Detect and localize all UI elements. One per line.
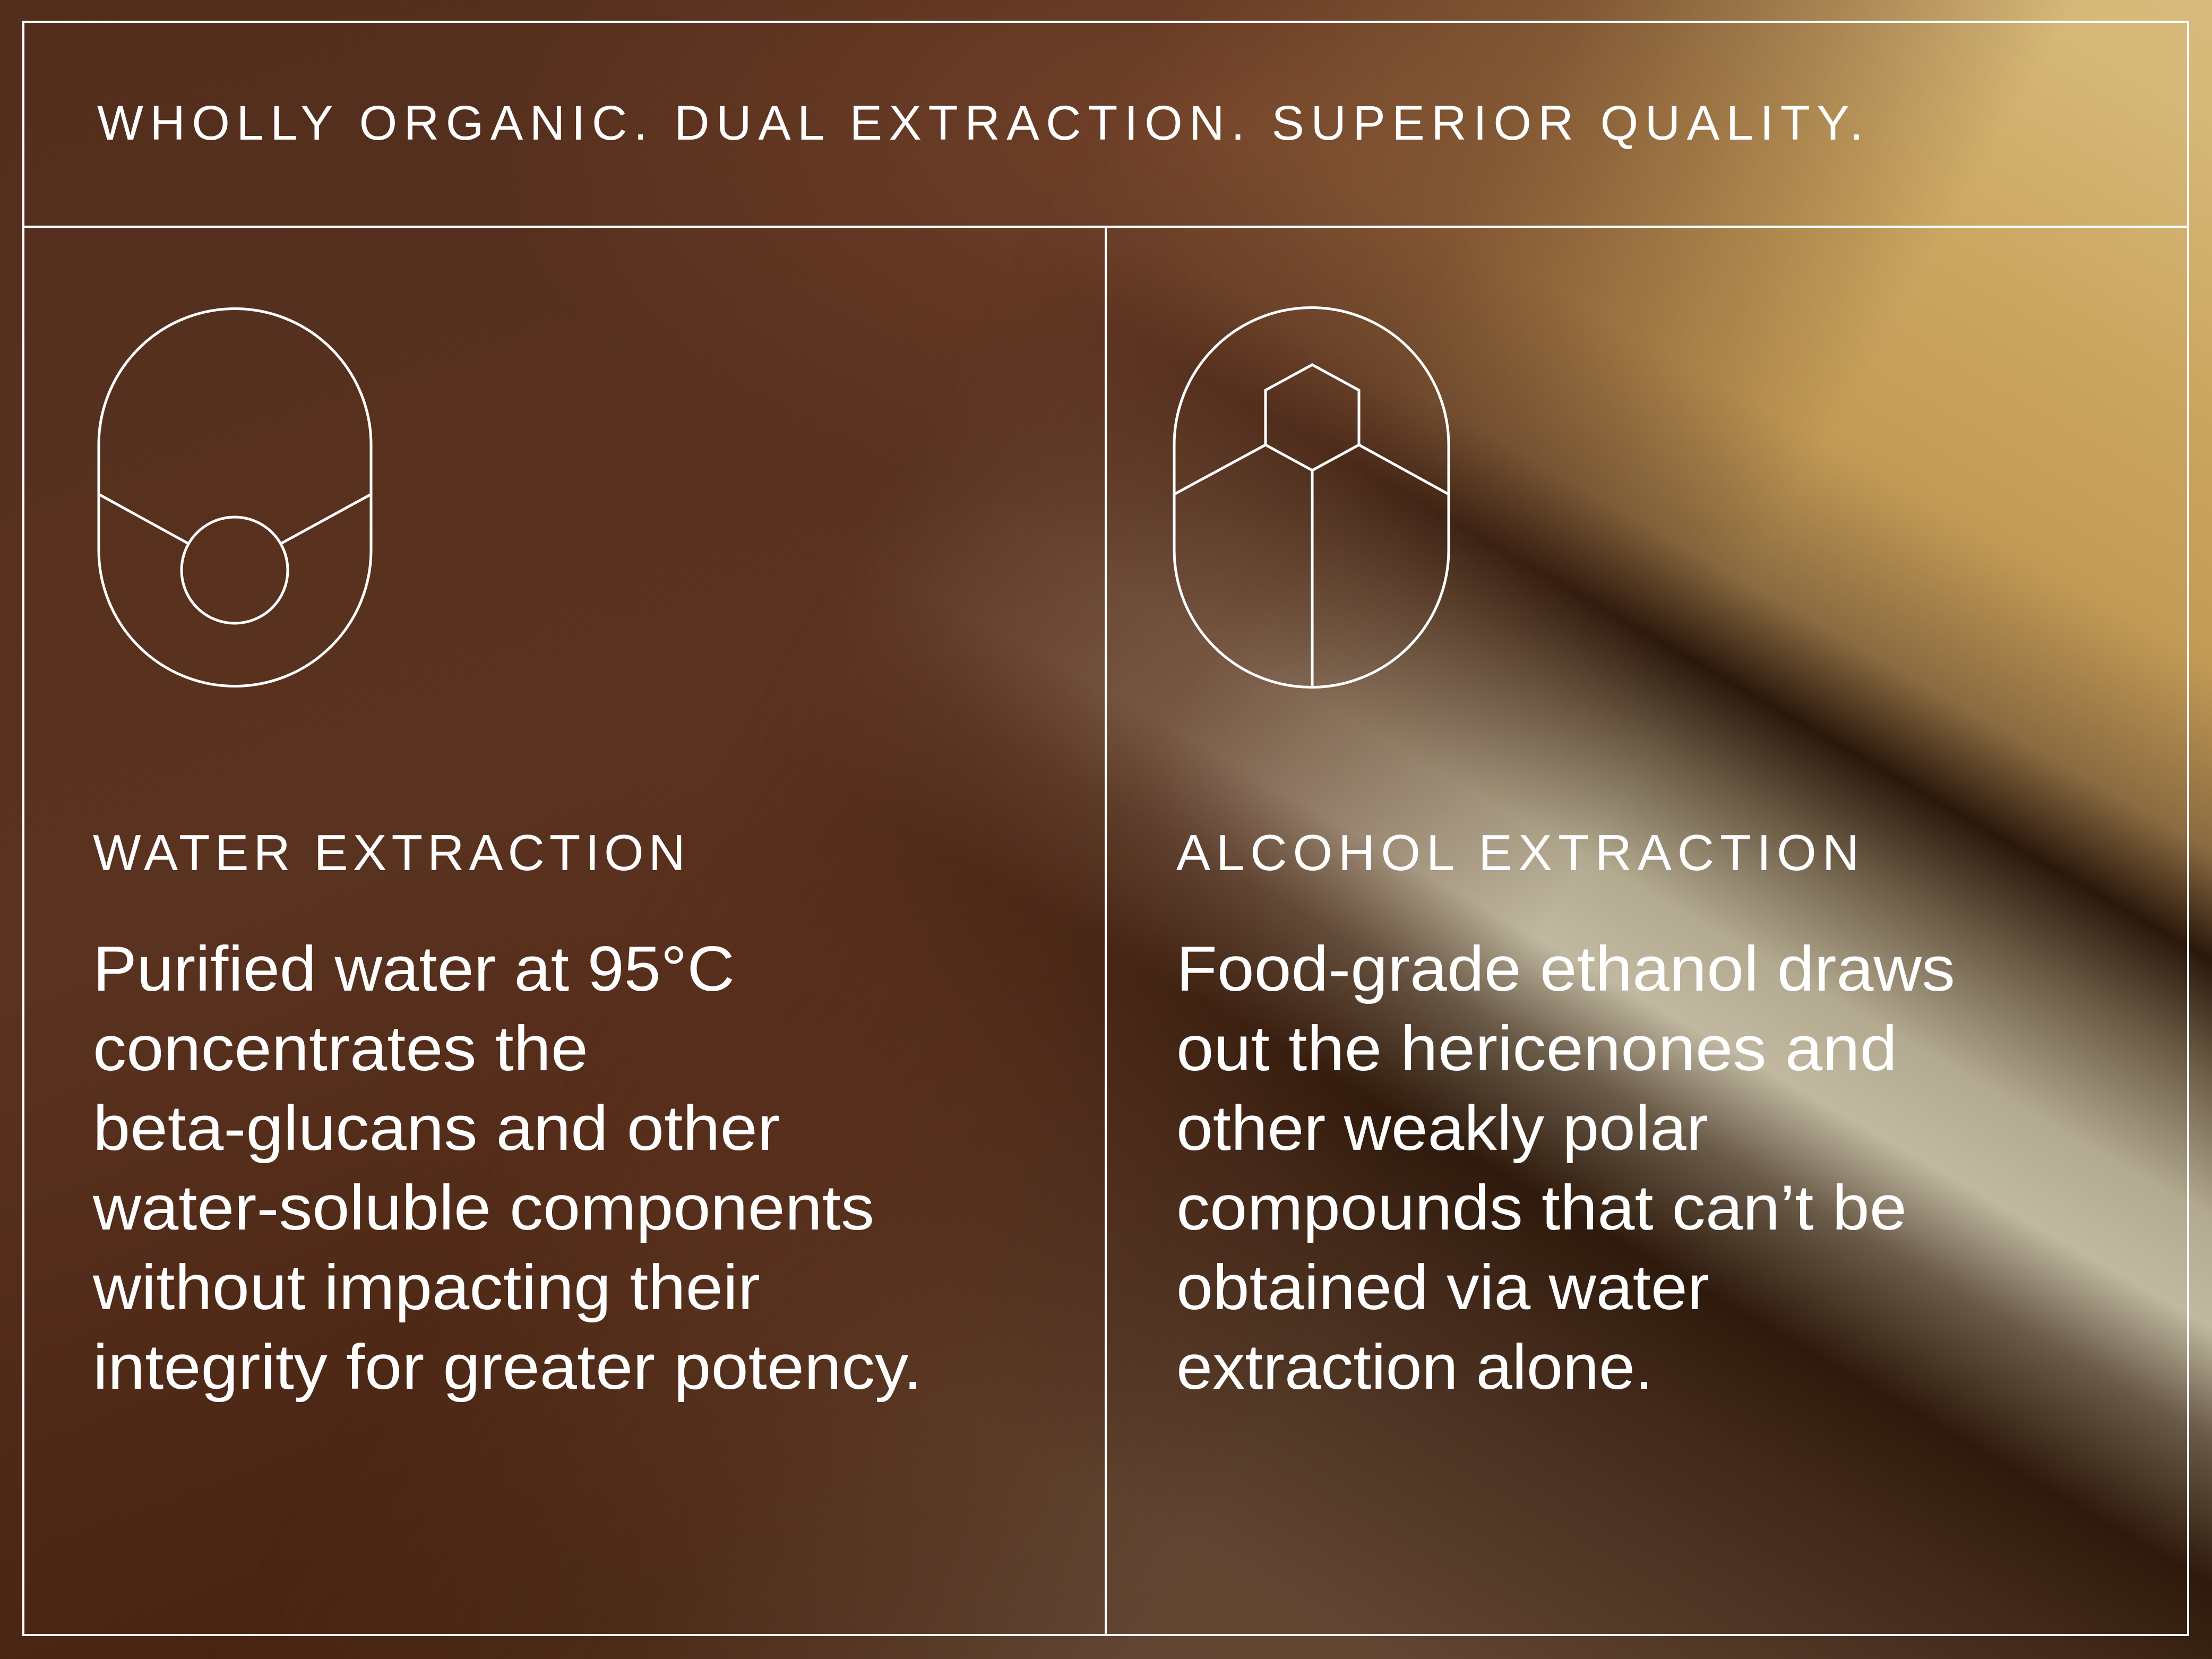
text block: water extraction: Purified water at 95°C xyxy=(93,933,735,1004)
icon: alcohol extraction xyxy=(1174,308,1449,687)
title: WHOLLY ORGANIC. DUAL EXTRACTION. SUPERIOR QUALITY. xyxy=(97,96,1863,150)
text block: water extraction: water-soluble components xyxy=(92,1172,874,1243)
icon: water extraction xyxy=(99,309,371,686)
text block: water extraction: concentrates the xyxy=(93,1013,588,1084)
text block: water extraction: integrity for greater potency. xyxy=(93,1331,922,1403)
text block: alcohol extraction: extraction alone. xyxy=(1176,1331,1653,1403)
text block: water extraction: without impacting their xyxy=(92,1252,760,1323)
text block: alcohol extraction: Food-grade ethanol draws xyxy=(1176,933,1955,1004)
heading: alcohol extraction: ALCOHOL EXTRACTION xyxy=(1176,824,1859,881)
background streaks xyxy=(566,0,2212,1659)
text block: alcohol extraction: other weakly polar xyxy=(1176,1093,1708,1164)
text block: water extraction xyxy=(92,933,922,1403)
heading: water extraction: WATER EXTRACTION xyxy=(93,824,685,881)
text block: alcohol extraction xyxy=(1176,933,1955,1403)
text block: alcohol extraction: compounds that can’t be xyxy=(1176,1172,1907,1243)
text block: water extraction: beta-glucans and other xyxy=(93,1093,780,1164)
text block: alcohol extraction: obtained via water xyxy=(1176,1252,1709,1323)
text block: alcohol extraction: out the hericenones and xyxy=(1176,1013,1897,1084)
